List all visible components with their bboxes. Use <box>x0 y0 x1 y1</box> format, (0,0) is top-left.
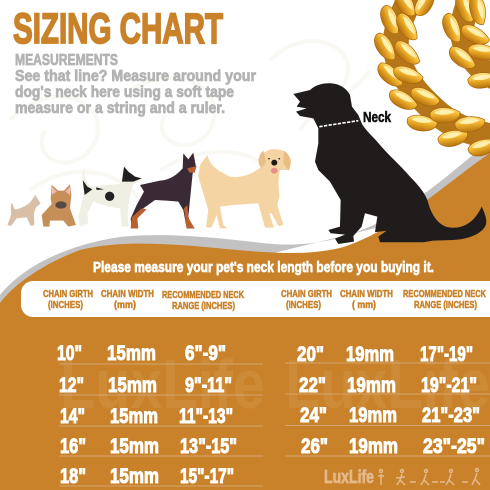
table: right column rows: 24" <box>300 404 327 427</box>
table: right column rows: 26" <box>301 435 328 458</box>
icon: gold chains <box>371 0 490 159</box>
panel: table header: (INCHES) <box>286 299 321 311</box>
table: right column rows <box>297 343 485 458</box>
measurements text block: dog's neck here using a soft tape <box>15 84 234 101</box>
measurements text block: measure or a string and a ruler. <box>15 100 225 117</box>
table: right column rows: 19mm <box>349 404 397 427</box>
icon: doberman <box>131 153 197 228</box>
panel: table header <box>21 281 490 317</box>
panel: table header: CHAIN WIDTH <box>101 288 154 300</box>
icon: chihuahua <box>7 195 41 226</box>
panel: table header: RANGE (INCHES) <box>172 300 235 312</box>
table: left column rows: 15"-17" <box>180 465 234 488</box>
neck label: Neck <box>363 109 392 126</box>
panel: table header: CHAIN GIRTH <box>281 288 332 300</box>
orange wave and table background <box>0 153 490 490</box>
measurements text block: See that line? Measure around your <box>15 68 256 85</box>
table: left column rows: 12" <box>59 374 84 397</box>
table: left column rows: 9"-11" <box>185 374 232 397</box>
logo: LuxLife with walkers: LuxLife <box>324 467 374 487</box>
table: left column rows: 11"-13" <box>179 405 233 428</box>
panel: table header: CHAIN WIDTH <box>340 288 393 300</box>
table: left column rows: 15mm <box>108 374 157 397</box>
table: left column rows <box>57 342 237 488</box>
row of dogs <box>7 149 291 228</box>
watermark <box>60 345 490 423</box>
icon: french bulldog <box>42 184 76 227</box>
table: right column rows: 19mm <box>346 343 394 366</box>
table: left column rows: 15mm <box>110 435 159 458</box>
table: left column rows: 18" <box>60 465 86 488</box>
table divider lines <box>59 363 490 486</box>
table: left column rows: 10" <box>57 342 82 365</box>
table: right column rows: 22" <box>299 374 326 397</box>
table: left column rows: 14" <box>60 405 85 428</box>
table: left column rows: 15mm <box>107 342 156 365</box>
logo: LuxLife with walkers <box>324 467 480 487</box>
panel: table header: (mm) <box>114 299 136 311</box>
title: SIZING CHART <box>13 5 223 53</box>
background curl pattern <box>10 41 370 200</box>
table: right column rows: 19mm <box>349 435 398 458</box>
table: left column rows: 16" <box>60 435 86 458</box>
measurements text block: MEASUREMENTS <box>15 52 118 69</box>
measurements text block <box>15 52 256 117</box>
table: right column rows: 19mm <box>347 374 396 397</box>
icon: rat terrier <box>78 165 143 227</box>
grey wave band <box>0 141 490 320</box>
panel: table header: ( mm) <box>352 299 376 311</box>
table: left column rows: 13"-15" <box>180 435 237 458</box>
table: left column rows: 15mm <box>110 405 158 428</box>
table: left column rows: 6"-9" <box>185 342 226 365</box>
panel: table header: RECOMMENDED NECK <box>162 289 244 301</box>
table: right column rows: 20" <box>297 343 324 366</box>
watermark: LuxLife <box>60 345 265 423</box>
table: left column rows: 15mm <box>110 465 159 488</box>
icon: black dog silhouette <box>293 83 486 244</box>
panel: table header: CHAIN GIRTH <box>43 288 93 300</box>
panel: table header: (INCHES) <box>48 299 83 311</box>
icon: golden retriever <box>198 149 291 228</box>
